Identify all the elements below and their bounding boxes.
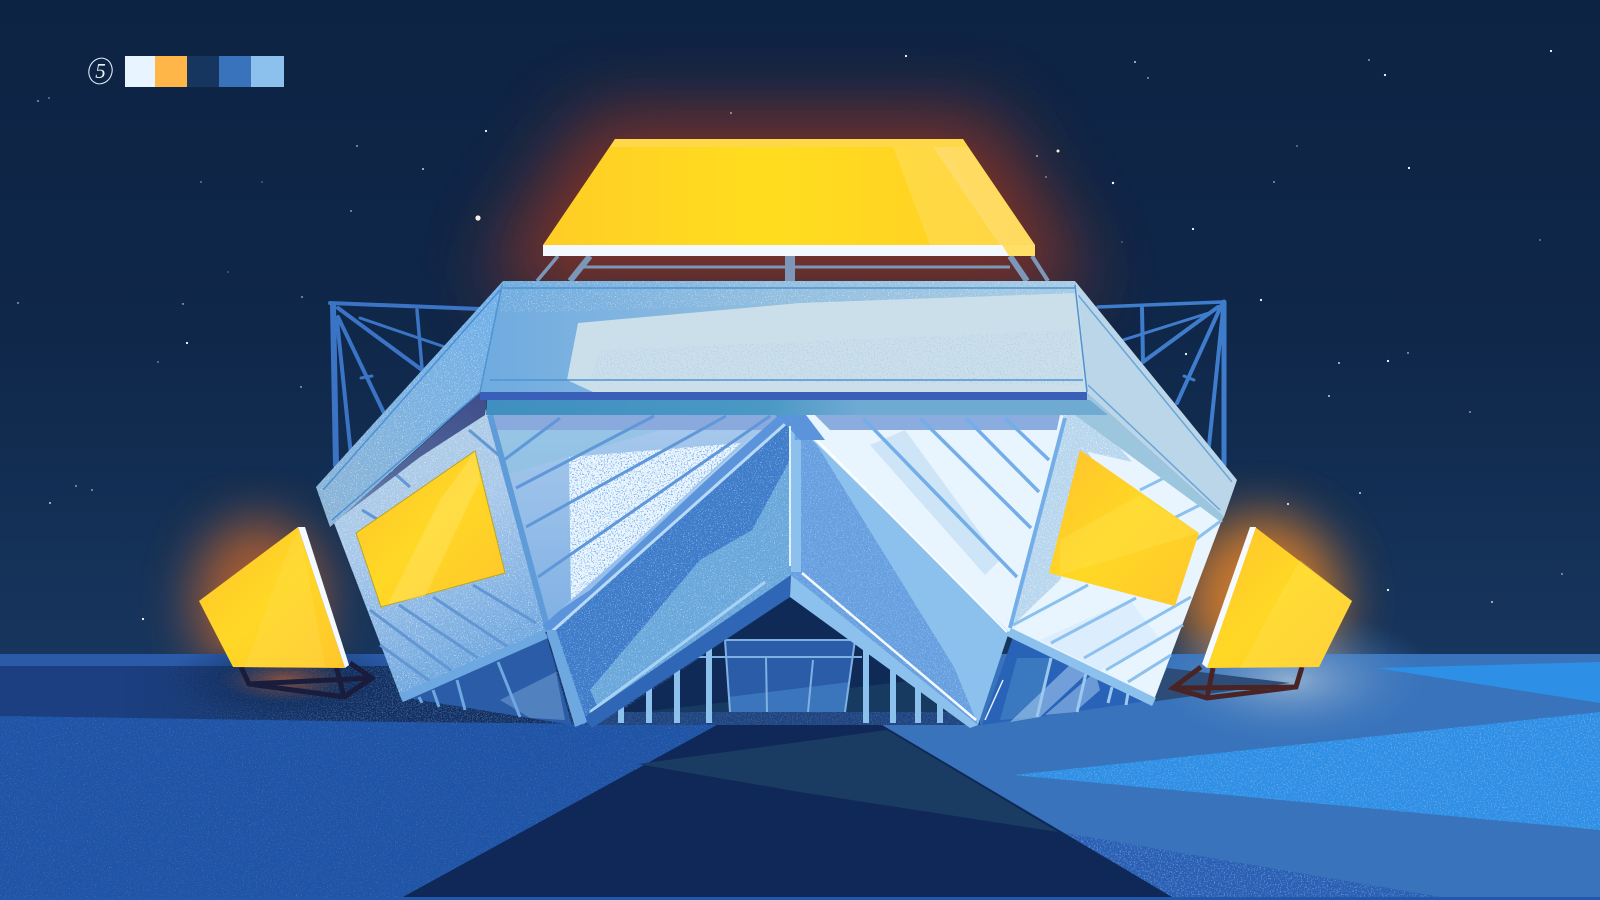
- left panel pale wedge: [560, 420, 770, 610]
- night sky background: [0, 0, 1600, 660]
- dim lamp light on left ground: [165, 638, 405, 722]
- left truss: [330, 303, 480, 465]
- entry frame lines: [695, 640, 862, 712]
- right ground light streak upper: [1376, 662, 1600, 703]
- right truss: [1098, 302, 1224, 465]
- left node strut: [490, 415, 548, 630]
- front edge yellow end: [1002, 245, 1035, 256]
- left window: [356, 451, 505, 607]
- entry floor strip: [585, 712, 980, 725]
- left underside band: [583, 575, 791, 728]
- right side face stripes: [1013, 475, 1222, 682]
- panel top edge: [610, 139, 968, 147]
- right bay tip highlight: [985, 680, 1003, 720]
- roof light panel: [543, 139, 1035, 256]
- palette number badge: [85, 55, 116, 87]
- right lamp legs: [1173, 667, 1302, 698]
- left lamp legs: [241, 663, 372, 697]
- left side face stripes: [362, 430, 536, 682]
- left panel lower highlight: [590, 582, 765, 712]
- right strut: [1010, 418, 1065, 628]
- left panel top band: [546, 417, 785, 630]
- roof pale face: [567, 293, 1087, 392]
- right main face stripes: [863, 418, 1049, 577]
- under-roof shadow wedge: [330, 393, 487, 527]
- panel bright reflection: [933, 147, 1035, 245]
- glow behind roof light panel: [495, 115, 1085, 300]
- roof panel supports: [537, 256, 1048, 281]
- right ground shadow under building: [1150, 668, 1290, 702]
- roof detail lines: [480, 285, 1087, 392]
- left middle face stripes: [504, 416, 770, 577]
- left main ground plane: [0, 716, 717, 900]
- right roof wing: [1075, 281, 1237, 517]
- ground: [0, 610, 1600, 900]
- left lamp: [199, 527, 372, 697]
- lower right darker wedge: [1065, 833, 1458, 900]
- roof teal soffit: [486, 400, 1108, 415]
- left side face: [334, 395, 546, 698]
- apex cap: [775, 415, 825, 440]
- left lamp white edge: [298, 527, 349, 668]
- stars: [17, 50, 1563, 620]
- right under-roof wedge: [1075, 393, 1224, 522]
- central node bar: [546, 630, 587, 727]
- glow behind right lamp: [1182, 515, 1342, 685]
- right underside band: [790, 575, 978, 728]
- right ground light streak lower: [1014, 712, 1600, 830]
- panel white front edge: [543, 245, 1035, 256]
- central dark shadow triangle: [403, 725, 1172, 897]
- left base beam: [401, 634, 546, 698]
- right base beam: [1009, 632, 1154, 702]
- speckled corner above window: [1062, 414, 1132, 462]
- right lamp: [1173, 527, 1352, 698]
- bottom edge strip: [0, 897, 1600, 900]
- right side face: [1009, 414, 1223, 702]
- roof dark fascia: [480, 392, 1087, 400]
- left middle face: [488, 415, 785, 632]
- right lamp white edge: [1202, 527, 1256, 668]
- panel pale reflection: [893, 147, 1000, 245]
- entry columns: [621, 636, 940, 723]
- glow behind left lamp: [193, 520, 323, 680]
- central teal shadow wedge: [638, 730, 1058, 832]
- roof main block: [480, 281, 1108, 415]
- right main white face: [780, 415, 1065, 632]
- left lower glazed bay: [401, 634, 572, 725]
- right central panel: [790, 417, 1009, 725]
- pavilion building: [316, 281, 1237, 728]
- palette number badge: 5: [95, 59, 106, 83]
- left roof wing: [316, 281, 503, 527]
- right lower glazed bay: [982, 637, 1154, 725]
- left central panel: [546, 417, 793, 725]
- palette swatches: [125, 56, 284, 87]
- colour palette: [85, 55, 284, 87]
- entry recess: [585, 597, 980, 725]
- right ground plane: [882, 654, 1600, 900]
- entry glass: [725, 640, 855, 712]
- right panel top band: [800, 423, 1007, 632]
- right ground spotlight: [1140, 610, 1440, 750]
- right window: [1049, 450, 1199, 606]
- central mullion: [789, 426, 801, 572]
